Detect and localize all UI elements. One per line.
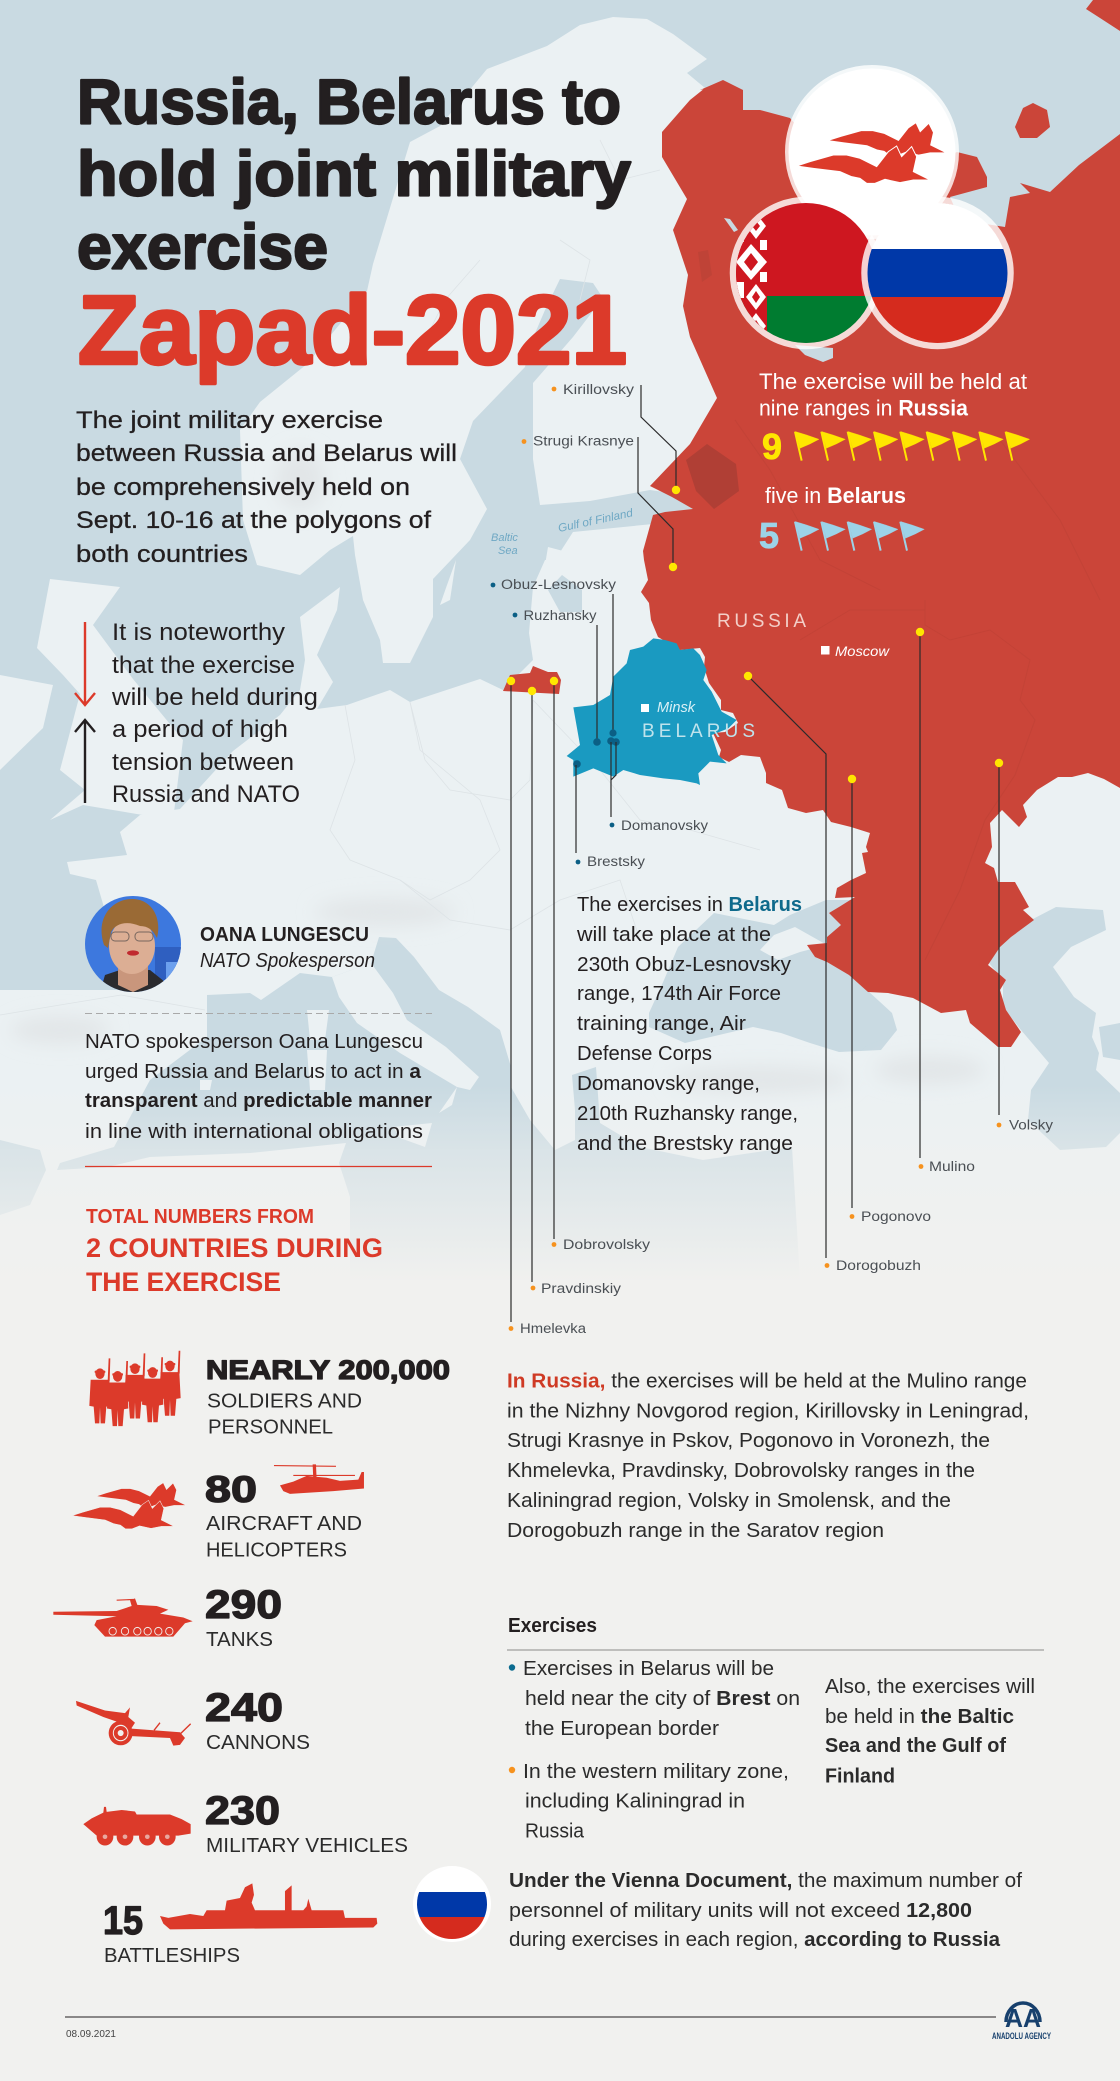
text: Russia ranges: In Russia, the exercises will be held at the Mulino range bbox=[507, 1370, 1027, 1392]
pointer: Obuz-Lesnovsky: Obuz-Lesnovsky bbox=[501, 577, 616, 592]
text: Belarus ranges: The exercises in Belarus bbox=[577, 893, 802, 916]
stat: soldiers: NEARLY 200,000 bbox=[206, 1355, 450, 1385]
text: Baltic Sea note bbox=[825, 1675, 1035, 1788]
pointer: Ruzhansky bbox=[513, 608, 601, 746]
title: exercise bbox=[77, 212, 328, 282]
stat: vehicles bbox=[205, 1789, 408, 1857]
pointer: Volsky: Volsky bbox=[1009, 1118, 1053, 1132]
stat: soldiers: SOLDIERS AND bbox=[207, 1390, 362, 1412]
icon: Russian flag badge bbox=[413, 1866, 491, 1942]
map label: Baltic Sea: Sea bbox=[498, 545, 518, 557]
pointer: Dorogobuzh bbox=[744, 672, 921, 1273]
pointer: Pravdinskiy: Pravdinskiy bbox=[541, 1281, 621, 1296]
stat: soldiers bbox=[206, 1355, 450, 1438]
icon: armoured vehicle bbox=[83, 1807, 191, 1846]
heading: total numbers: TOTAL NUMBERS FROM bbox=[86, 1206, 314, 1228]
stat: vehicles: 230 bbox=[205, 1789, 280, 1833]
portrait caption: NATO Spokesperson bbox=[200, 950, 375, 972]
map label: Gulf of Finland: Gulf of Finland bbox=[557, 507, 635, 535]
stat: tanks: TANKS bbox=[206, 1629, 273, 1651]
icon: opposing arrows bbox=[75, 622, 95, 803]
heading: total numbers: 2 COUNTRIES DURING bbox=[86, 1233, 383, 1263]
pointer: Hmelevka bbox=[507, 677, 587, 1336]
row: nine yellow flags bbox=[762, 426, 1030, 467]
map: Russia bbox=[641, 0, 1120, 1047]
row: five blue flags bbox=[759, 515, 924, 556]
text: noteworthy note: tension between bbox=[112, 749, 294, 776]
text: NATO statement: in line with international obligations bbox=[85, 1121, 423, 1143]
text: NATO statement: urged Russia and Belarus to act in a bbox=[85, 1061, 422, 1083]
icon: soldiers bbox=[89, 1351, 181, 1426]
map label: Belarus and Minsk: Minsk bbox=[657, 699, 696, 716]
pointer: Pogonovo: Pogonovo bbox=[861, 1209, 931, 1224]
text: Vienna Document: personnel of military units will not exceed 12,800 bbox=[509, 1899, 972, 1922]
list: exercise locations: Exercises in Belarus will be bbox=[523, 1657, 774, 1680]
stat: vehicles: MILITARY VEHICLES bbox=[206, 1835, 408, 1857]
pointer: Dobrovolsky: Dobrovolsky bbox=[563, 1237, 650, 1252]
text: Belarus ranges: and the Brestsky range bbox=[577, 1132, 793, 1155]
badge: Russia flag bbox=[864, 200, 1010, 346]
text: Baltic Sea note: Finland bbox=[825, 1764, 895, 1788]
pointer: Ruzhansky: Ruzhansky bbox=[524, 608, 597, 623]
icon: warship bbox=[160, 1883, 377, 1929]
stat: aircraft: AIRCRAFT AND bbox=[206, 1513, 362, 1535]
text: noteworthy note: that the exercise bbox=[112, 652, 295, 679]
text: NATO statement: transparent and predictable manner bbox=[85, 1090, 432, 1112]
text: Belarus ranges: 210th Ruzhansky range, bbox=[577, 1102, 798, 1125]
list: exercise locations bbox=[509, 1657, 800, 1842]
pointer: Dorogobuzh: Dorogobuzh bbox=[836, 1258, 921, 1273]
text: Belarus ranges: will take place at the bbox=[576, 923, 771, 946]
pointer: Kirillovsky bbox=[552, 382, 680, 494]
stat: battleships: BATTLESHIPS bbox=[104, 1945, 240, 1967]
text: noteworthy note: will be held during bbox=[111, 684, 318, 711]
intro text bbox=[76, 407, 457, 568]
title: Zapad-2021: Zapad-2021 bbox=[78, 276, 627, 384]
text: Belarus ranges bbox=[576, 893, 802, 1155]
map label: Russia and Moscow bbox=[717, 611, 890, 659]
text: Russia ranges: Dorogobuzh range in the Saratov region bbox=[507, 1519, 884, 1542]
text: noteworthy note bbox=[111, 619, 318, 808]
pointer: Mulino bbox=[916, 628, 975, 1174]
icon: helicopter bbox=[274, 1464, 364, 1494]
heading: total numbers bbox=[86, 1206, 383, 1297]
pointer: Strugi Krasnye: Strugi Krasnye bbox=[533, 434, 634, 448]
list: exercise locations: including Kaliningrad in bbox=[525, 1790, 745, 1812]
stat: soldiers: PERSONNEL bbox=[208, 1416, 333, 1438]
logo: Anadolu Agency: AA bbox=[1005, 2003, 1041, 2033]
map label: Baltic Sea bbox=[491, 532, 518, 557]
logo: Anadolu Agency bbox=[992, 2003, 1051, 2041]
text: Vienna Document: during exercises in each region, according to Russia bbox=[509, 1928, 1001, 1951]
pointer: Domanovsky bbox=[607, 737, 708, 833]
pointer: Kirillovsky: Kirillovsky bbox=[563, 382, 634, 397]
text: Vienna Document bbox=[509, 1869, 1022, 1951]
pointer: Pogonovo bbox=[848, 775, 931, 1224]
text: Vienna Document: Under the Vienna Document, the maximum number of bbox=[509, 1869, 1022, 1892]
text: Belarus ranges: Defense Corps bbox=[577, 1042, 712, 1065]
stat: aircraft: HELICOPTERS bbox=[206, 1540, 347, 1562]
map label: Belarus and Minsk: BELARUS bbox=[642, 721, 755, 742]
icon: tank bbox=[53, 1598, 193, 1637]
list: exercise locations: held near the city of Brest on bbox=[525, 1687, 800, 1710]
text: noteworthy note: Russia and NATO bbox=[112, 781, 300, 808]
stat: cannons bbox=[205, 1686, 310, 1754]
badge: Belarus flag bbox=[733, 200, 879, 346]
text: Russia ranges bbox=[507, 1370, 1029, 1542]
title: Russia, Belarus to bbox=[77, 68, 621, 138]
text: Russia ranges: Kaliningrad region, Volsky in Smolensk, and the bbox=[507, 1489, 951, 1512]
text: nine ranges: nine ranges in Russia bbox=[759, 396, 969, 420]
text: nine ranges bbox=[759, 369, 1027, 420]
pointer: Strugi Krasnye bbox=[522, 434, 677, 571]
text: five in Belarus: five in Belarus bbox=[765, 483, 906, 508]
stat: cannons: CANNONS bbox=[206, 1732, 310, 1754]
portrait: Oana Lungescu bbox=[85, 896, 181, 992]
text: NATO statement: NATO spokesperson Oana Lungescu bbox=[85, 1031, 423, 1053]
stat: aircraft bbox=[205, 1469, 362, 1562]
pointer: Mulino: Mulino bbox=[929, 1159, 975, 1174]
text: Belarus ranges: training range, Air bbox=[577, 1012, 746, 1035]
stat: battleships: 15 bbox=[103, 1899, 143, 1943]
text: Belarus ranges: range, 174th Air Force bbox=[577, 982, 781, 1005]
pointer: Hmelevka: Hmelevka bbox=[520, 1321, 587, 1336]
pointer: Domanovsky: Domanovsky bbox=[621, 818, 708, 833]
title bbox=[77, 68, 631, 282]
intro text: be comprehensively held on bbox=[76, 474, 410, 501]
intro text: between Russia and Belarus will bbox=[76, 440, 457, 467]
map: Kaliningrad bbox=[503, 666, 561, 694]
list: exercise locations: Russia bbox=[525, 1820, 585, 1842]
heading: exercises: Exercises bbox=[508, 1615, 597, 1637]
text: NATO statement bbox=[85, 1031, 432, 1143]
list: exercise locations: In the western military zone, bbox=[523, 1760, 789, 1783]
stat: cannons: 240 bbox=[205, 1686, 283, 1730]
row: nine yellow flags: 9 bbox=[762, 426, 782, 467]
text: Belarus ranges: 230th Obuz-Lesnovsky bbox=[577, 953, 792, 976]
text: noteworthy note: It is noteworthy bbox=[112, 619, 285, 646]
portrait caption: OANA LUNGESCU bbox=[200, 924, 369, 946]
stat: aircraft: 80 bbox=[205, 1469, 257, 1510]
intro text: Sept. 10-16 at the polygons of bbox=[76, 507, 431, 534]
row: five blue flags: 5 bbox=[759, 515, 779, 556]
icon: jets bbox=[72, 1483, 185, 1529]
heading: total numbers: THE EXERCISE bbox=[86, 1267, 281, 1297]
intro text: both countries bbox=[76, 541, 248, 568]
text: Baltic Sea note: Sea and the Gulf of bbox=[825, 1734, 1006, 1757]
map label: Baltic Sea: Baltic bbox=[491, 532, 518, 544]
stat: tanks bbox=[205, 1583, 282, 1651]
map label: Belarus and Minsk bbox=[641, 699, 755, 742]
portrait caption bbox=[200, 924, 375, 972]
logo: Anadolu Agency: ANADOLU AGENCY bbox=[992, 2031, 1051, 2041]
text: Baltic Sea note: Also, the exercises will bbox=[825, 1675, 1035, 1698]
pointer: Brestsky: Brestsky bbox=[587, 854, 645, 869]
pointer: Brestsky bbox=[573, 760, 645, 869]
pointer: Obuz-Lesnovsky bbox=[491, 577, 617, 737]
pointer: Dobrovolsky bbox=[550, 677, 650, 1252]
pointer: Volsky bbox=[995, 759, 1053, 1132]
stat: battleships bbox=[103, 1899, 240, 1967]
text: Russia ranges: in the Nizhny Novgorod region, Kirillovsky in Leningrad, bbox=[507, 1400, 1029, 1422]
text: nine ranges: The exercise will be held at bbox=[759, 369, 1027, 394]
text: Russia ranges: Strugi Krasnye in Pskov, Pogonovo in Voronezh, the bbox=[507, 1429, 990, 1452]
intro text: The joint military exercise bbox=[76, 407, 383, 434]
list: exercise locations: the European border bbox=[525, 1717, 719, 1740]
title: hold joint military bbox=[77, 140, 631, 210]
stat: tanks: 290 bbox=[205, 1583, 282, 1627]
text: noteworthy note: a period of high bbox=[112, 716, 288, 743]
pointer: Pravdinskiy bbox=[528, 687, 621, 1296]
map: Belarus bbox=[567, 638, 737, 785]
text: Baltic Sea note: be held in the Baltic bbox=[825, 1705, 1014, 1728]
footer date: 08.09.2021 bbox=[66, 2028, 116, 2040]
text: Belarus ranges: Domanovsky range, bbox=[577, 1072, 760, 1095]
map label: Russia and Moscow: RUSSIA bbox=[717, 611, 806, 632]
icon: cannon bbox=[76, 1701, 191, 1746]
badge: jets circle bbox=[788, 68, 956, 236]
text: Russia ranges: Khmelevka, Pravdinsky, Dobrovolsky ranges in the bbox=[507, 1459, 975, 1482]
map label: Russia and Moscow: Moscow bbox=[835, 643, 890, 659]
footer rule bbox=[65, 2016, 996, 2018]
